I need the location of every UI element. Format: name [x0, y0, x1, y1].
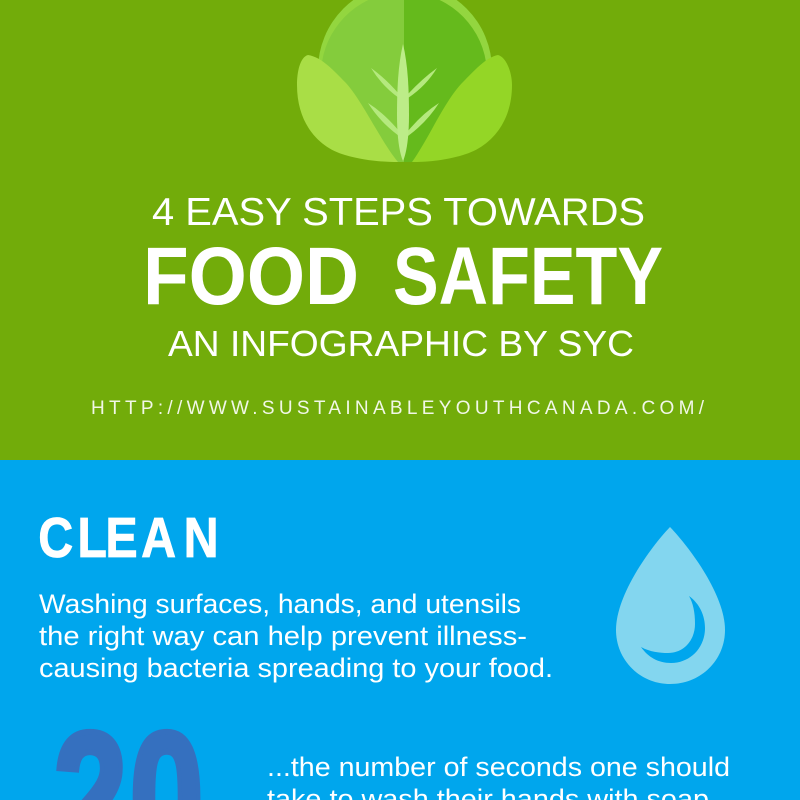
subheading: an infographic by SYC: AN INFOGRAPHIC BY SYC: [168, 323, 634, 364]
text block: clean description: causing bacteria spreading to your food.: [39, 653, 553, 683]
icon: water drop: [616, 527, 725, 684]
text block: clean description: [39, 589, 553, 683]
text block: clean description: the right way can help prevent illness-: [39, 621, 527, 651]
heading: 4 easy steps towards: 4 EASY STEPS TOWARDS: [152, 191, 645, 234]
text block: 20 seconds: [267, 752, 730, 800]
text block: clean description: Washing surfaces, hands, and utensils: [39, 589, 521, 619]
title: food safety: FOOD: [143, 231, 359, 322]
panel: green header: [0, 0, 800, 460]
heading: clean: CLEAN: [38, 506, 219, 570]
text block: 20 seconds: ...the number of seconds one should: [267, 752, 730, 782]
url: HTTP://WWW.SUSTAINABLEYOUTHCANADA.COM/: [91, 398, 705, 419]
panel: clean: [0, 460, 800, 800]
icon: lettuce: [297, 0, 512, 162]
title: food safety: SAFETY: [393, 231, 663, 322]
